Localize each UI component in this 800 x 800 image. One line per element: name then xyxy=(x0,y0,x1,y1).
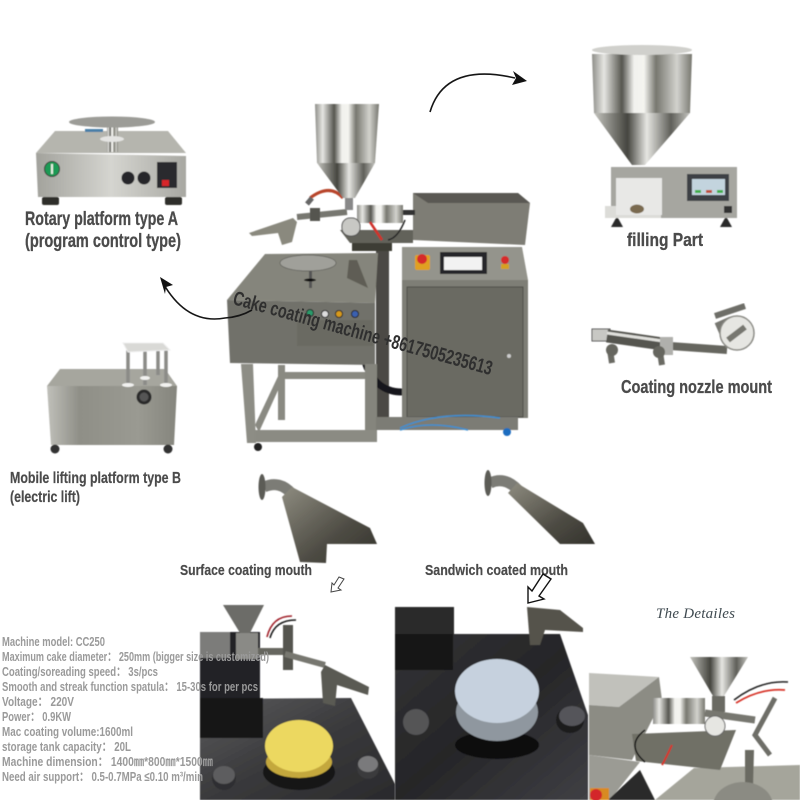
arrow: machine to filling part xyxy=(430,71,527,112)
dispenser xyxy=(340,230,413,243)
control cabinet xyxy=(402,247,528,280)
heading: surface coating mouth label: Surface coating mouth xyxy=(180,562,312,579)
heading: mobile lifting platform label: Mobile lifting platform type B xyxy=(10,470,181,487)
watermark: machine name and phone: Cake coating machine +8617505235613 xyxy=(231,288,495,380)
heading: mobile lifting platform label: (electric lift) xyxy=(10,489,80,506)
image: rotary platform type A xyxy=(36,116,186,205)
image: main cake coating machine xyxy=(227,104,530,451)
photo: sandwich coated cake on platform xyxy=(395,607,588,800)
text block: machine specifications: Maximum cake diameter： 250mm (bigger size is customized) xyxy=(2,649,269,664)
text block: machine specifications: Mac coating volume:1600ml xyxy=(2,724,133,739)
image: surface coating mouth xyxy=(258,474,377,563)
heading: the details: The Detailes xyxy=(656,606,735,622)
text block: machine specifications: Machine dimension： 1400㎜*800㎜*1500㎜ xyxy=(2,754,213,769)
left table box xyxy=(227,253,378,303)
image: sandwich coated mouth xyxy=(484,470,595,544)
heading: sandwich coated mouth label: Sandwich coated mouth xyxy=(425,562,568,579)
text block: machine specifications: Voltage： 220V xyxy=(2,694,74,709)
heading: filling part label: filling Part xyxy=(627,230,703,250)
hopper xyxy=(317,163,375,198)
photo: machine detail xyxy=(589,657,800,800)
photo: cake on surface coating platform xyxy=(200,605,395,800)
image: mobile lifting platform type B xyxy=(47,343,177,454)
text block: machine specifications: Smooth and streak function spatula： 15-30s for per pcs xyxy=(2,679,258,694)
image: coating nozzle mount xyxy=(592,306,754,365)
text block: machine specifications: Power： 0.9KW xyxy=(2,709,72,724)
heading: mobile lifting platform label xyxy=(10,470,181,506)
arrow: small hollow down arrow xyxy=(331,577,344,592)
upper tank xyxy=(413,193,530,245)
arrow: large hollow down arrow xyxy=(528,574,551,603)
text block: machine specifications: Need air support： 0.5-0.7MPa ≤0.10 m³/min xyxy=(2,769,203,784)
image: filling part xyxy=(592,45,737,227)
text block: machine specifications: storage tank capacity： 20L xyxy=(2,739,131,754)
rotary disc xyxy=(309,270,312,288)
text block: machine specifications: Machine model: CC250 xyxy=(2,634,105,649)
heading: rotary platform label: (program control type) xyxy=(25,231,181,252)
arrow: machine to rotary platform xyxy=(160,277,252,319)
text block: machine specifications: Coating/soreading speed： 3s/pcs xyxy=(2,664,158,679)
heading: rotary platform label: Rotary platform type A xyxy=(25,209,178,230)
heading: rotary platform label xyxy=(25,209,181,252)
text block: machine specifications xyxy=(2,634,269,784)
